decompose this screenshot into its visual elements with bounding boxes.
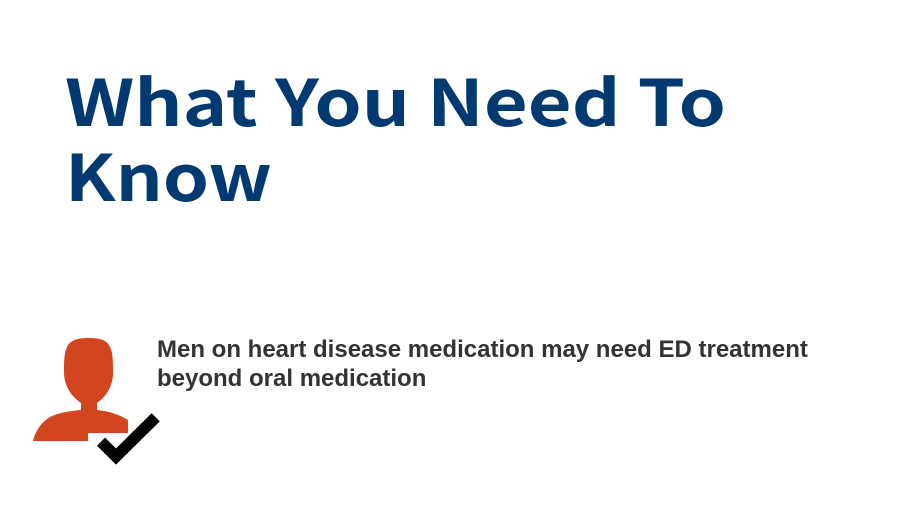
title bbox=[65, 53, 726, 220]
icon: check mark bbox=[101, 417, 156, 456]
title: Know bbox=[65, 128, 272, 220]
text block: key message bbox=[157, 336, 808, 392]
text block: key message: beyond oral medication bbox=[157, 365, 426, 392]
text block: key message: Men on heart disease medication may need ED treatment bbox=[157, 336, 808, 363]
title: What You Need To bbox=[65, 53, 726, 145]
icon: person with check mark bbox=[33, 338, 156, 456]
icon: person silhouette bbox=[33, 338, 128, 441]
